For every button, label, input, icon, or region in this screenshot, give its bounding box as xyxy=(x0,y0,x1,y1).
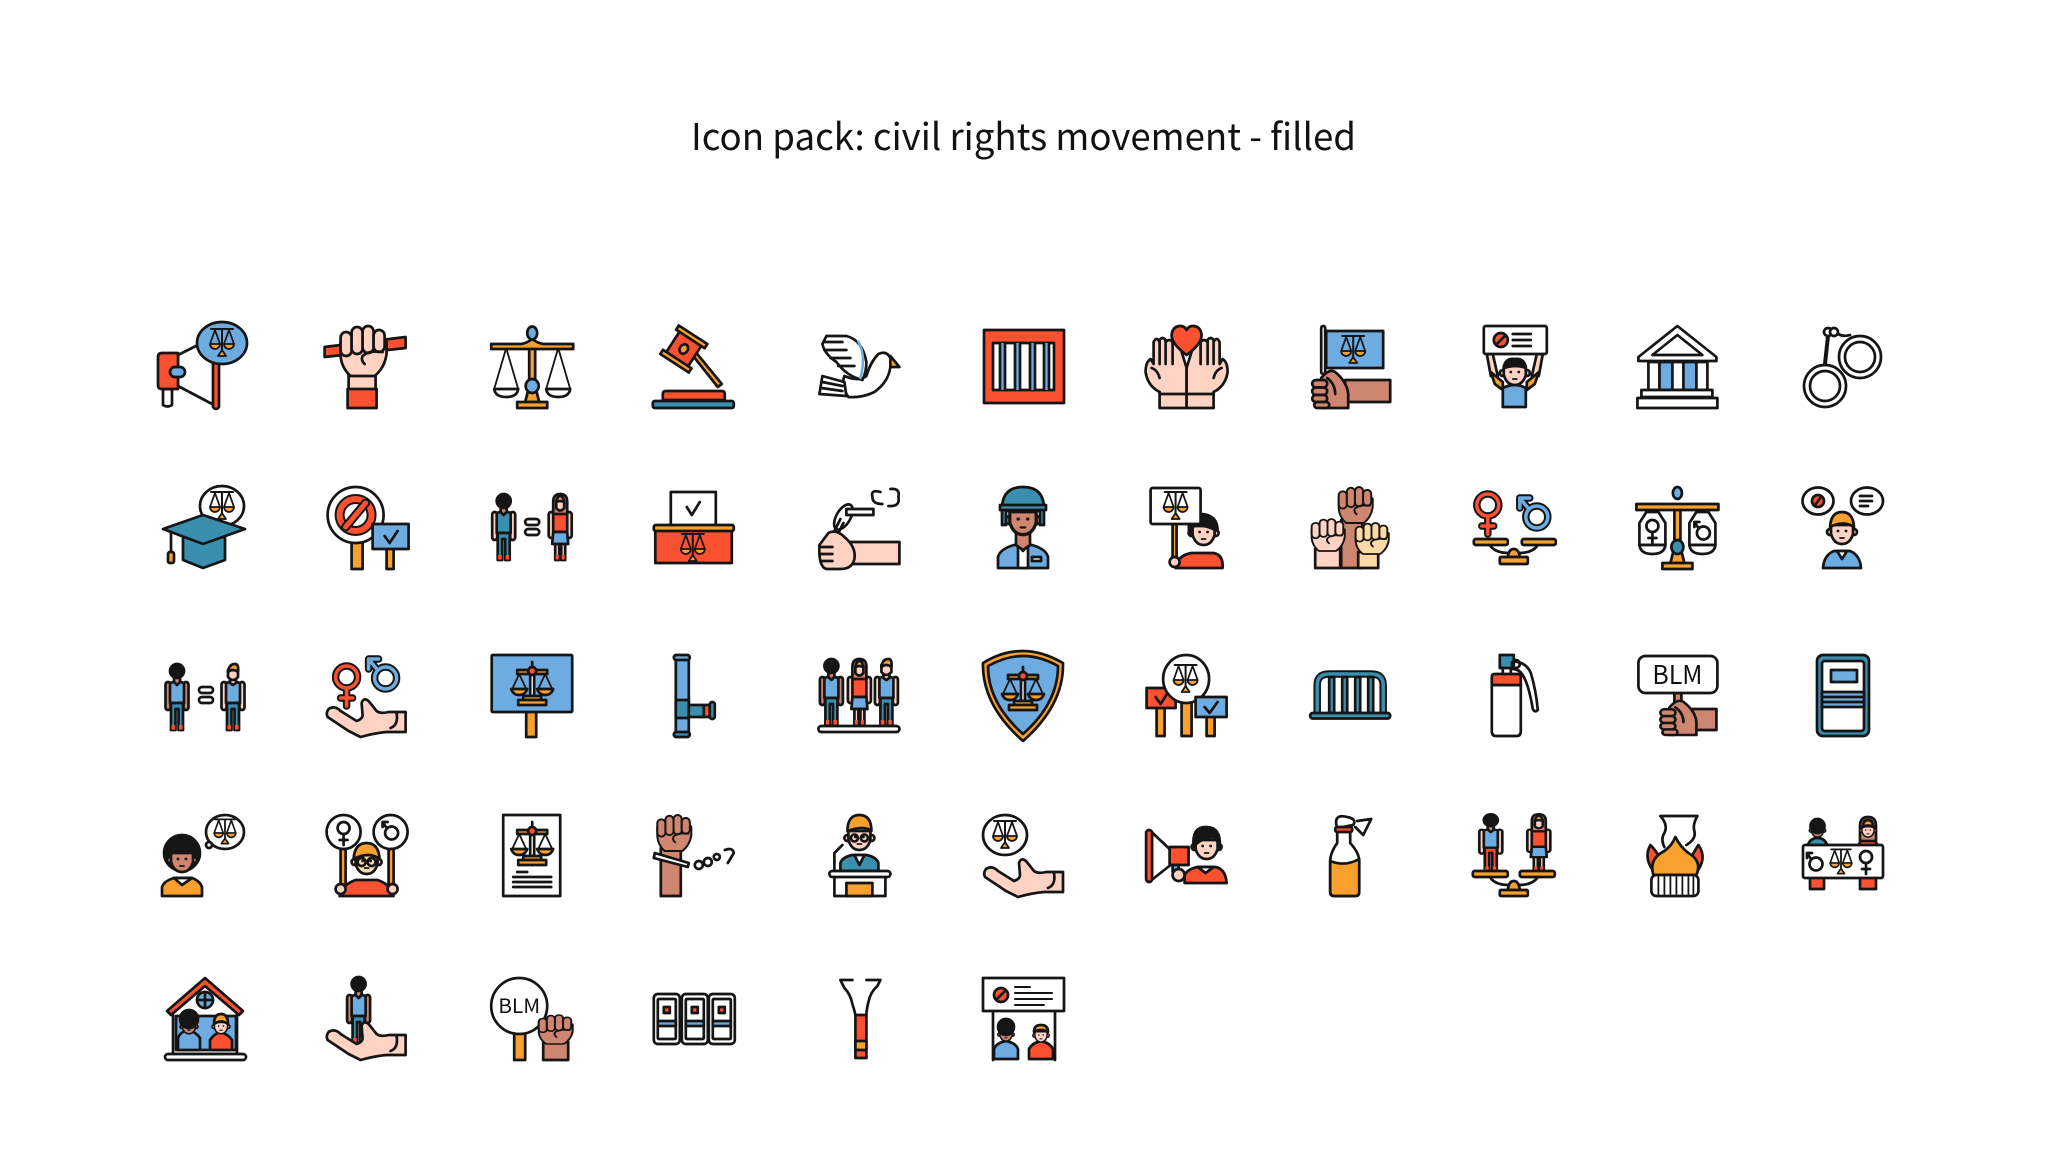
icon: three raised fists xyxy=(1312,487,1389,568)
icon: person with scales sign xyxy=(1151,488,1223,568)
icon: dove xyxy=(819,336,899,397)
icon: person holding protest sign xyxy=(1484,326,1547,407)
icon: prison bars xyxy=(984,330,1064,403)
icon: person holding gender signs xyxy=(327,815,408,896)
icon: molotov bottle xyxy=(1330,816,1371,896)
icon: gavel xyxy=(653,325,734,408)
icon: people in house xyxy=(165,978,246,1060)
icon: sign with two people xyxy=(983,978,1064,1060)
icon: BLM sign with fist: BLM xyxy=(1652,655,1702,692)
icon: justice shield xyxy=(983,651,1063,741)
icon: handcuffs xyxy=(1804,328,1881,407)
icon grid xyxy=(158,322,1883,1060)
icon: tear gas canister xyxy=(1492,655,1538,736)
icon: raised fist with red band xyxy=(325,326,406,408)
icon: scales of justice xyxy=(491,326,573,408)
icon: hands holding heart xyxy=(1146,326,1228,408)
icon: man thinking of justice xyxy=(162,815,244,896)
icon: BLM sign with fist xyxy=(1638,655,1717,735)
icon: judge at podium xyxy=(829,815,890,896)
icon: person with two speech bubbles xyxy=(1802,488,1883,568)
icon: row of riot shields xyxy=(654,994,735,1044)
icon: hand breaking chain xyxy=(819,489,899,569)
icon: BLM round sign with fist xyxy=(491,978,573,1060)
title: Icon pack: civil rights movement - filled xyxy=(691,107,1356,161)
icon: BLM round sign with fist: BLM xyxy=(498,990,540,1019)
icon: fist holding flag xyxy=(1312,326,1390,408)
icon: courthouse xyxy=(1637,326,1717,408)
icon: fist with broken handcuff xyxy=(654,815,734,896)
icon: police baton xyxy=(674,655,715,737)
icon: graduation cap with balloon xyxy=(163,486,245,568)
icon: scales with gender symbols xyxy=(1636,487,1718,569)
icon: balloon over hand xyxy=(983,815,1063,897)
icon: group of three people on platform xyxy=(818,659,899,732)
icon: legal document xyxy=(503,815,560,896)
icon: two people with banner xyxy=(1803,817,1883,889)
icon: protest placards xyxy=(1147,655,1227,736)
icon: person on hand xyxy=(327,977,406,1060)
icon: men equal xyxy=(166,664,244,730)
icon: person with megaphone xyxy=(1146,827,1227,883)
icon: man equals woman xyxy=(492,494,572,560)
icon: people balanced on scale xyxy=(1473,814,1555,896)
icon: crowd barricade xyxy=(1310,674,1390,718)
icon: prohibition sign and check sign xyxy=(328,487,409,569)
icon: gender symbols on balance xyxy=(1474,494,1556,564)
icon: lit bottle with cloth xyxy=(840,980,880,1058)
icon: ballot box xyxy=(654,492,734,563)
icon: burning flame xyxy=(1647,816,1703,896)
icon: megaphone with justice balloon xyxy=(158,322,247,409)
icon: gender symbols over hand xyxy=(327,659,406,737)
icon: scales placard xyxy=(492,655,572,737)
icon: riot shield xyxy=(1817,655,1869,736)
icon: riot police officer xyxy=(998,487,1048,568)
